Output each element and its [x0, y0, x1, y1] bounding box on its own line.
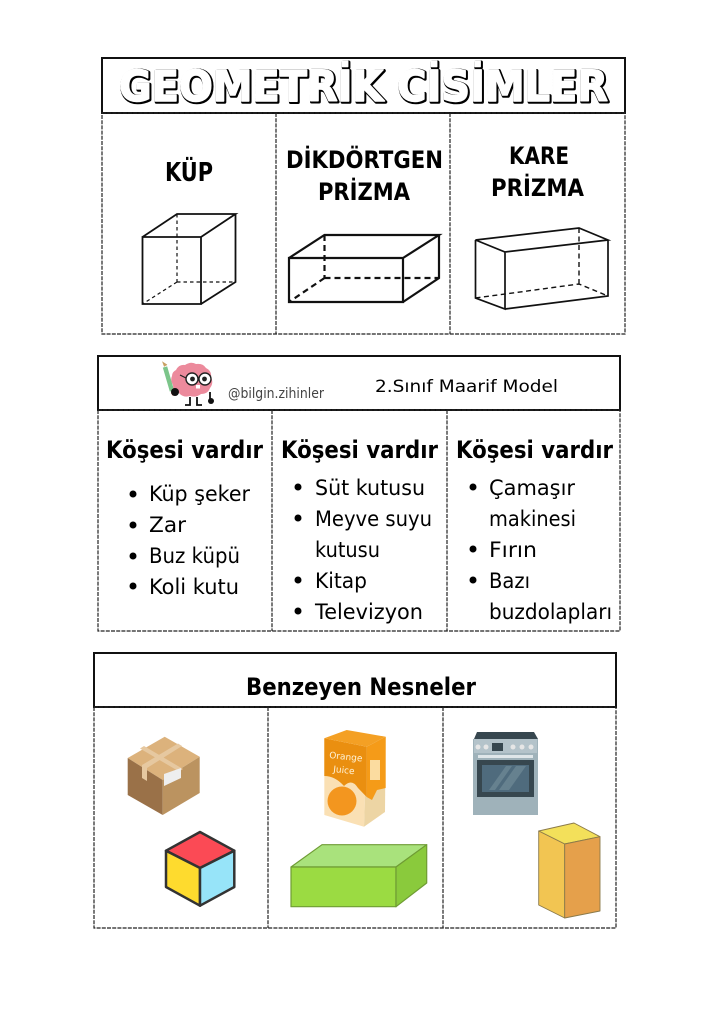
column: square prism examples: makinesi [489, 507, 576, 531]
icon: coloured cube [166, 832, 234, 906]
column: cube examples: Köşesi vardır [106, 436, 263, 464]
heading: square prism [491, 142, 584, 202]
icon: juice carton: Orange [329, 751, 363, 765]
icon: cardboard box [128, 737, 200, 815]
title: GEOMETRİK CİSİMLER [119, 61, 608, 112]
column: rectangular prism examples: Meyve suyu [315, 507, 432, 531]
heading: square prism: KARE [509, 142, 569, 170]
column: square prism examples: Köşesi vardır [456, 436, 613, 464]
heading: rectangular prism: DİKDÖRTGEN [286, 144, 443, 174]
panel: geometric solids [102, 58, 625, 334]
panel: features [98, 356, 620, 631]
grade text: 2.Sınıf Maarif Model [375, 377, 558, 397]
icon: green prism [291, 845, 427, 907]
column: rectangular prism examples: kutusu [315, 538, 380, 562]
column: rectangular prism examples: Televizyon [314, 600, 423, 624]
column: cube examples: Koli kutu [149, 575, 239, 599]
features grid [98, 410, 620, 631]
icon: oven [473, 732, 538, 815]
header strip [98, 356, 620, 410]
icon: yellow prism [539, 823, 600, 918]
column: cube examples [106, 436, 263, 599]
column: square prism examples: Fırın [489, 538, 537, 562]
column: cube examples: Buz küpü [149, 544, 240, 568]
objects grid [94, 707, 616, 928]
heading: square prism: PRİZMA [491, 173, 584, 202]
column: cube examples: Zar [149, 513, 186, 537]
icon: cube wireframe [142, 214, 236, 304]
column: rectangular prism examples: Süt kutusu [315, 476, 425, 500]
icon: square prism wireframe [476, 228, 608, 309]
heading: rectangular prism [286, 144, 443, 206]
panel: similar objects [94, 653, 616, 928]
column: rectangular prism examples: Köşesi vardır [281, 436, 438, 464]
solids grid [102, 113, 625, 334]
heading: Benzeyen Nesneler [246, 673, 476, 701]
column: rectangular prism examples: Kitap [315, 569, 367, 593]
icon: juice carton: Juice [332, 765, 355, 777]
column: square prism examples [456, 436, 613, 624]
handle text: @bilgin.zihinler [228, 386, 324, 402]
icon: juice carton [324, 730, 386, 827]
icon: brain mascot [163, 362, 214, 405]
icon: rectangular prism wireframe [289, 235, 439, 302]
title: GEOMETRİK CİSİMLER [120, 62, 609, 113]
heading [94, 653, 616, 707]
column: square prism examples: Bazı [489, 569, 530, 593]
column: cube examples: Küp şeker [149, 482, 250, 506]
column: square prism examples: Çamaşır [489, 476, 575, 500]
column: square prism examples: buzdolapları [489, 600, 612, 624]
heading: cube: KÜP [165, 155, 213, 188]
heading: rectangular prism: PRİZMA [318, 177, 410, 206]
column: rectangular prism examples [281, 436, 438, 624]
